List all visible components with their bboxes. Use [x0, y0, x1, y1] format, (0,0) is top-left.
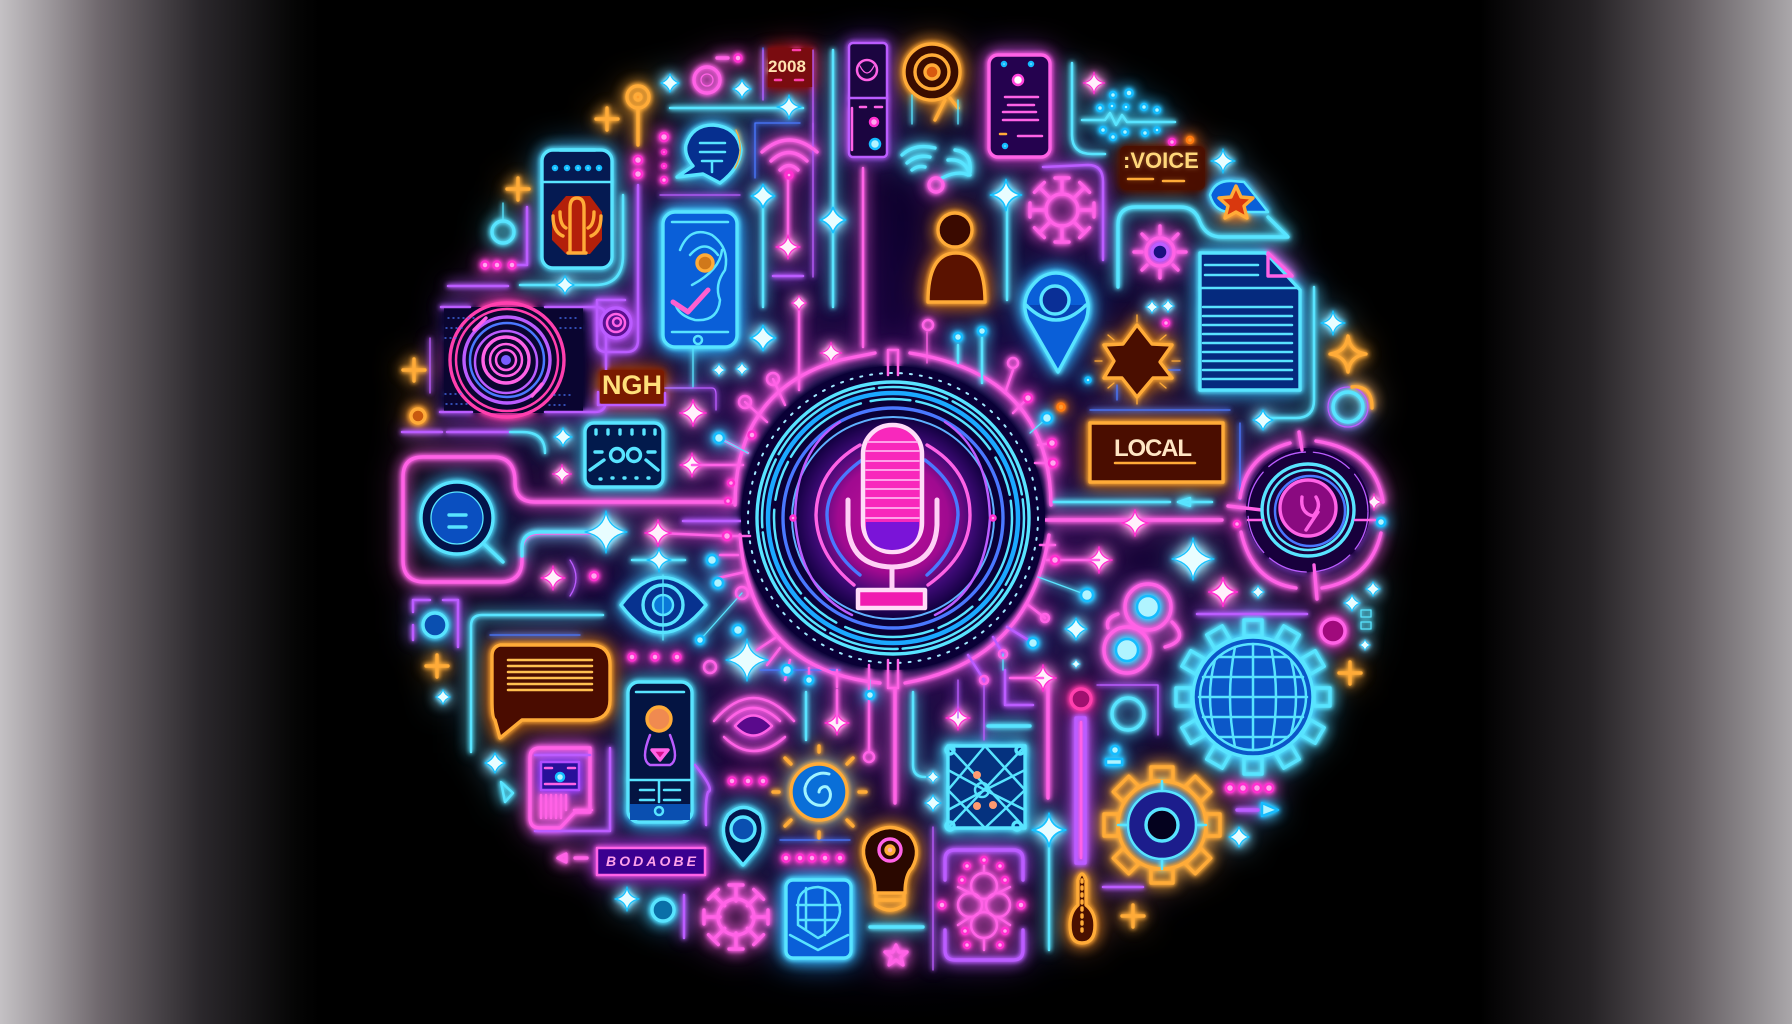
icon: small swirl [601, 308, 631, 338]
center dial [735, 350, 1051, 688]
label: NGH: NGH [602, 370, 662, 400]
icon: magnifying glass [421, 482, 503, 562]
label: VOICE [1120, 137, 1205, 190]
dart right [1237, 803, 1278, 816]
arcs [795, 422, 990, 615]
icon: orange sun with spiral [773, 746, 866, 838]
connector lines [402, 48, 1314, 970]
icon: cyan globe gear [1176, 620, 1330, 774]
icon: molecule panel [938, 850, 1024, 960]
icon: cyan network square [946, 746, 1025, 830]
icon: cyan map pin [723, 808, 763, 865]
icon: mini person [1106, 746, 1122, 765]
cyan connector to spark [522, 532, 595, 556]
icon: small gear [1134, 226, 1186, 278]
label: bottom magenta plate: BODAOBE [606, 853, 697, 869]
icon: orange pin [627, 86, 649, 145]
icon: ring in bracket [423, 613, 447, 637]
icon: microphone [848, 425, 937, 608]
icon: orange speech bubble [492, 645, 610, 738]
label: LOCAL [1090, 423, 1223, 482]
icon: magenta eye [714, 698, 794, 751]
icon: sound wave dots [1082, 90, 1175, 140]
dotted track [748, 373, 1038, 663]
big magenta outline with magnifier connector [403, 457, 733, 582]
sparkles: orange [403, 108, 1366, 927]
badge: 2008: 2008 [768, 57, 806, 76]
icon: orange hexagram star [1095, 315, 1180, 404]
icon: magenta card [530, 748, 592, 828]
icon: magenta gear large top right [1030, 178, 1094, 242]
label: LOCAL: LOCAL [1114, 435, 1192, 462]
background haze disc [373, 0, 1413, 1024]
icon: speech bubble cyan [677, 125, 741, 183]
inner rings [783, 408, 1003, 628]
icon: phone with fingerprint (orange) [542, 150, 612, 268]
icon: wifi cyan pair [902, 147, 970, 192]
icon: orange thermometer [1070, 874, 1095, 943]
icon: big fingerprint disc [440, 303, 606, 417]
icon: phone with pin [628, 682, 692, 822]
icon: wifi magenta [762, 140, 817, 178]
icon: magenta phone card [989, 55, 1050, 157]
icon: orange dot left [411, 409, 425, 423]
icon: person [928, 213, 985, 302]
sparkles: magenta [541, 72, 1382, 735]
icon: target [904, 44, 960, 124]
icon: cyan ring [1097, 685, 1158, 735]
icon: cyan shape with orange star [1210, 181, 1268, 218]
outer magenta ring [735, 353, 1051, 683]
icon: right target [1228, 432, 1385, 599]
cyan band [757, 382, 1029, 654]
icon: eye cyan [621, 575, 706, 640]
top and bottom caps [888, 350, 898, 688]
icon: magenta gear bottom [704, 885, 768, 949]
dots near sun star [1086, 320, 1169, 382]
icon: document [1200, 253, 1300, 390]
badge: 2008 [763, 48, 813, 130]
label: VOICE: :VOICE [1123, 148, 1199, 173]
icon: calendar panel [585, 423, 663, 487]
icon: small magenta swirl top [694, 58, 728, 93]
icon: small ring magenta [1321, 619, 1345, 643]
mini chips text marks [1361, 610, 1371, 629]
icon: pink pin tube [1071, 689, 1091, 863]
icon: orange gear with cyan ring [1104, 767, 1220, 883]
sparkles: cyan [436, 74, 1380, 911]
icon: ring bottom left [652, 899, 674, 921]
icon: ring left [492, 221, 514, 243]
icon: cursor [501, 782, 513, 802]
dots: magenta column [482, 54, 742, 268]
dots row [590, 572, 1273, 862]
icon: phone with spiral and check [663, 212, 737, 347]
icon: linked circles [1104, 584, 1180, 673]
icon: map pin [1025, 273, 1088, 372]
radial nodes [655, 320, 1099, 762]
label: bottom magenta plate [558, 848, 705, 875]
icon: purple phone top [849, 43, 887, 157]
dart [1178, 498, 1190, 506]
icon: cyan ring orange arc [1328, 387, 1372, 427]
icon: star bottom [885, 945, 907, 965]
icon: bulb [863, 828, 917, 910]
icon: cyan card with globe [786, 880, 851, 958]
